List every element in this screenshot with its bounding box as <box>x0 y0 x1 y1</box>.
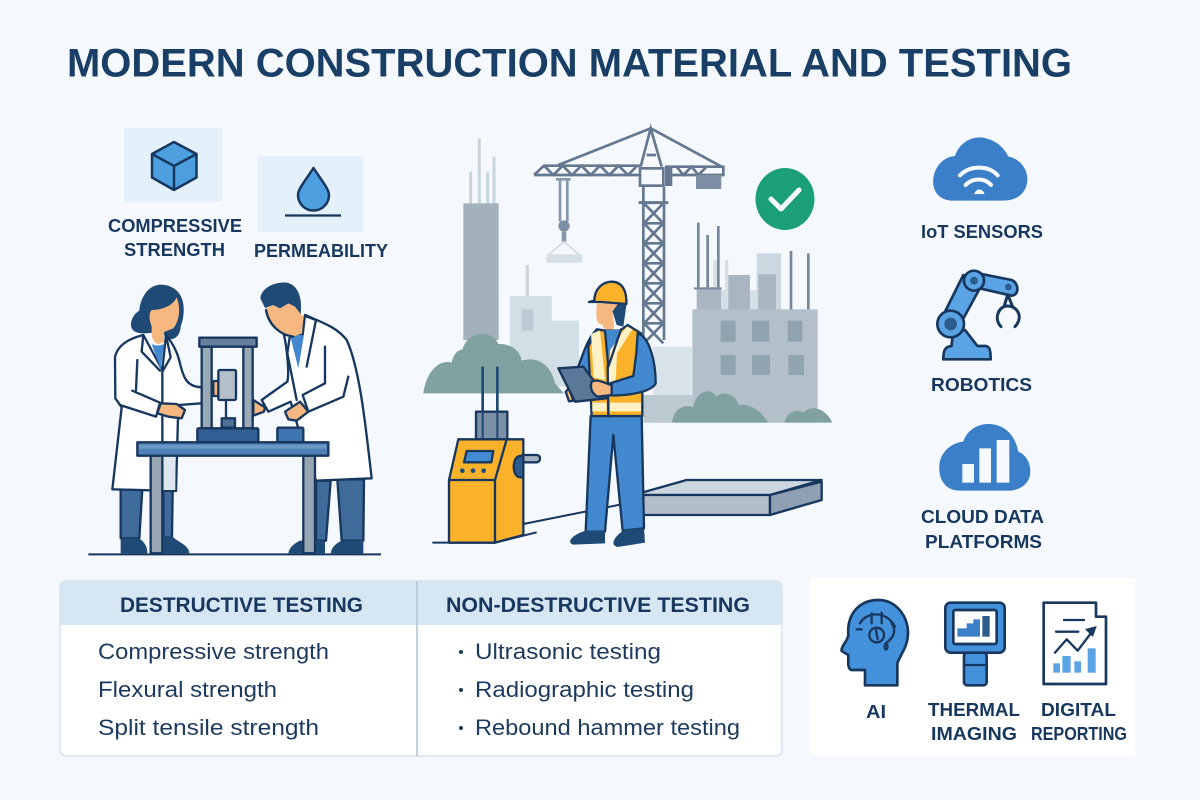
tower crane <box>534 128 723 347</box>
label: compressive strength: STRENGTH <box>124 240 225 260</box>
concrete slab <box>633 480 822 515</box>
worker <box>558 282 656 547</box>
label: compressive strength <box>108 216 242 260</box>
panel: digital tools <box>810 578 1135 755</box>
tool: cloud data platforms <box>921 424 1044 552</box>
title: MODERN CONSTRUCTION MATERIAL AND TESTING <box>67 42 1072 86</box>
icon: thermal imager <box>945 603 1005 685</box>
icon tile: cube <box>124 128 222 202</box>
specimen block <box>277 428 303 442</box>
column: non-destructive testing: NON-DESTRUCTIVE TESTING <box>446 594 750 617</box>
label: IoT sensors: IoT SENSORS <box>921 222 1043 242</box>
column: non-destructive testing: Radiographic testing <box>475 677 694 702</box>
icon: digital report <box>1044 603 1106 684</box>
worker legs and boots <box>570 416 645 547</box>
worker arms and safety vest <box>578 325 656 417</box>
tool: robotics <box>931 271 1032 395</box>
bushes <box>423 334 832 423</box>
column: destructive testing: Split tensile strength <box>98 715 319 740</box>
label: AI: AI <box>866 702 886 722</box>
column: non-destructive testing: Rebound hammer testing <box>475 715 740 740</box>
label: thermal imaging: THERMAL <box>928 700 1020 720</box>
icon: AI head <box>842 600 908 685</box>
clipboard tablet and hands <box>558 367 612 402</box>
column: destructive testing: Flexural strength <box>98 677 277 702</box>
column: non-destructive testing: Ultrasonic testing <box>475 639 661 664</box>
label: digital reporting: REPORTING <box>1031 724 1127 744</box>
column: destructive testing <box>98 594 363 740</box>
table: destructive vs non-destructive testing <box>60 581 782 756</box>
panel: compressive strength <box>108 128 242 260</box>
icon: cloud with bars <box>939 424 1030 491</box>
worker head and hard hat <box>589 282 627 331</box>
background buildings <box>463 138 818 423</box>
label: thermal imaging <box>928 700 1020 744</box>
label: digital reporting <box>1031 700 1127 744</box>
tool: IoT sensors <box>921 137 1043 242</box>
column: destructive testing: Compressive strength <box>98 639 329 664</box>
panel: permeability <box>254 156 388 261</box>
label: cloud data platforms: CLOUD DATA <box>921 507 1044 527</box>
illustration: construction site background <box>423 128 832 547</box>
worker upper body <box>558 282 656 417</box>
lab table <box>137 442 328 553</box>
label: cloud data platforms: PLATFORMS <box>925 532 1042 552</box>
icon: wifi cloud <box>933 137 1027 201</box>
label: thermal imaging: IMAGING <box>931 724 1017 744</box>
icon: green check badge <box>756 168 814 230</box>
column: non-destructive testing <box>446 594 750 740</box>
icon tile: water drop <box>258 156 363 232</box>
technician: woman <box>112 285 202 553</box>
testing machine <box>197 338 258 442</box>
column: destructive testing: DESTRUCTIVE TESTING <box>120 594 363 617</box>
technician: man <box>253 283 372 553</box>
icon: robot arm <box>937 271 1019 359</box>
label: digital reporting: DIGITAL <box>1041 700 1116 720</box>
label: robotics: ROBOTICS <box>931 375 1032 395</box>
testing equipment: rebound device <box>432 367 540 543</box>
label: compressive strength: COMPRESSIVE <box>108 216 242 236</box>
label: cloud data platforms <box>921 507 1044 552</box>
illustration: laboratory technicians testing a specimen <box>88 283 381 554</box>
label: permeability: PERMEABILITY <box>254 241 388 261</box>
